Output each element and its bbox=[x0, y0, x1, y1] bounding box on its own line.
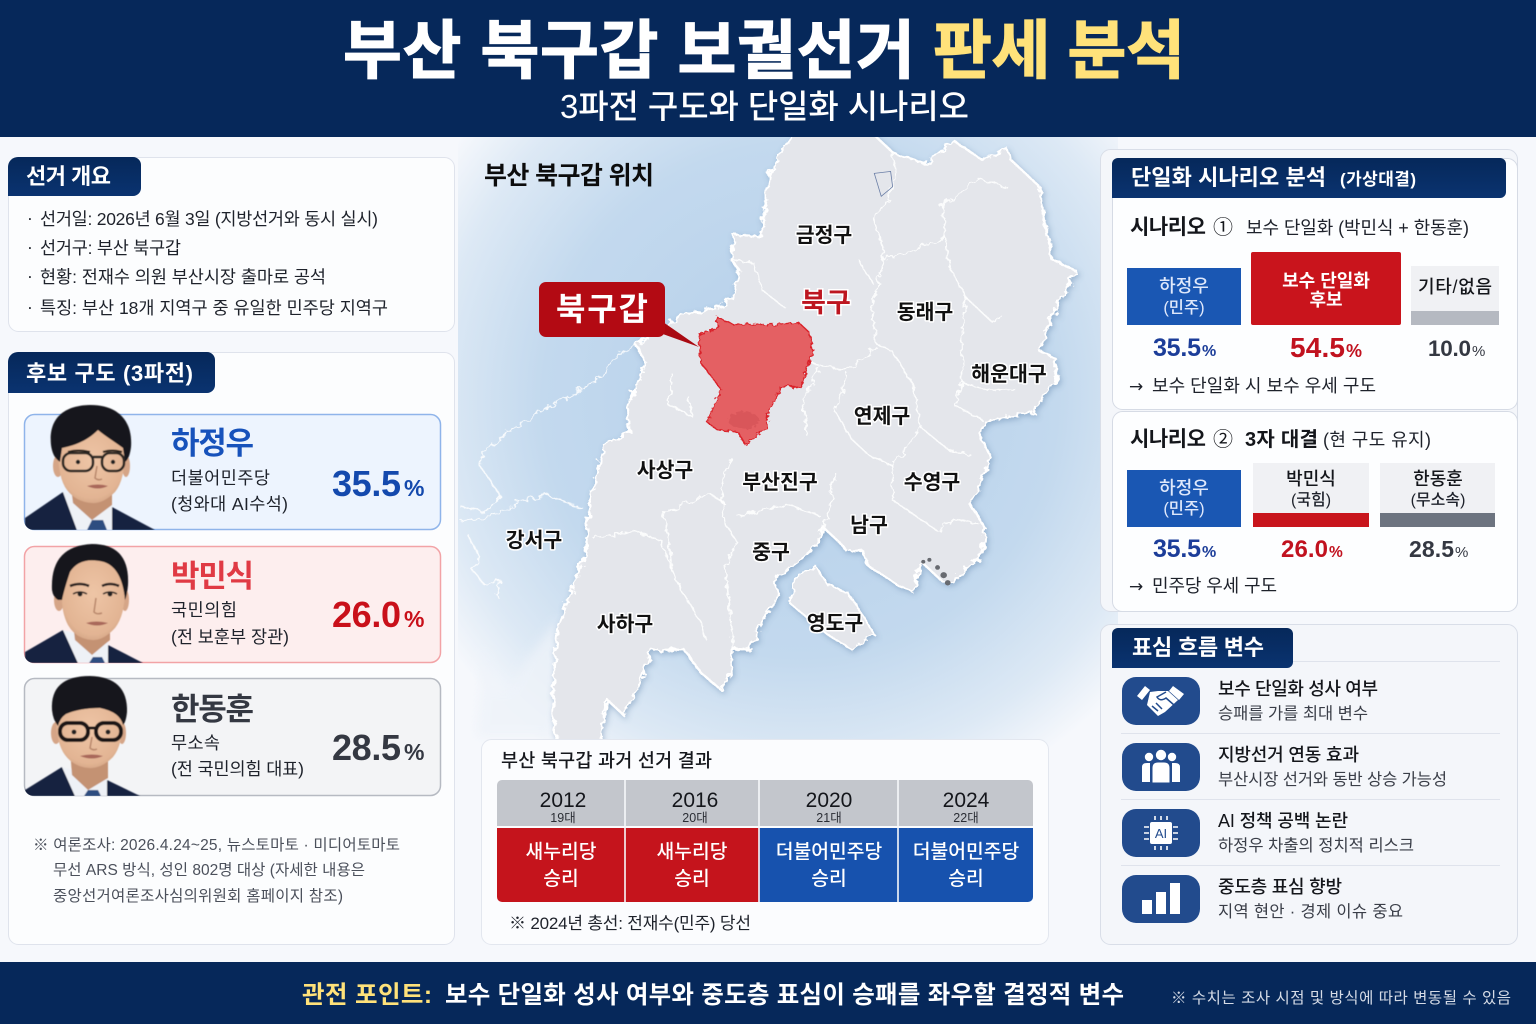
footer: ※ 수치는 조사 시점 및 방식에 따라 변동될 수 있음 bbox=[1171, 989, 1511, 1007]
scenario 1 box: (가상대결) bbox=[1340, 170, 1416, 189]
detail: northern reservoir and southern rocks bbox=[874, 171, 951, 585]
results table: 2016 bbox=[672, 789, 718, 812]
map district labels: 해운대구 bbox=[971, 363, 1047, 386]
header bbox=[0, 0, 1536, 137]
scenario 2 percentages: % bbox=[1455, 544, 1468, 561]
portrait: Han Dong-hoon bbox=[25, 676, 140, 796]
results table: 20대 bbox=[682, 811, 708, 825]
results table: 19대 bbox=[550, 811, 576, 825]
title bbox=[343, 15, 1185, 87]
overview bullets: · bbox=[27, 266, 33, 286]
icon: AI chip: AI bbox=[1155, 826, 1167, 841]
candidate card: Han Dong-hoon: % bbox=[404, 739, 424, 765]
scenario 1 box: ① bbox=[1213, 216, 1233, 239]
portrait: Park Min-sik bbox=[25, 544, 143, 663]
scenario 1 bars: 후보 bbox=[1309, 290, 1343, 310]
item: AI policy vacuum: AI 정책 공백 논란 bbox=[1218, 811, 1348, 831]
candidate card: Han Dong-hoon: (전 국민의힘 대표) bbox=[171, 759, 304, 779]
candidate card: Han Dong-hoon: 28.5 bbox=[332, 727, 401, 768]
results table: 더불어민주당 bbox=[913, 841, 1019, 863]
survey note bbox=[33, 836, 400, 905]
scenario 1 conclusion: 보수 단일화 시 보수 우세 구도 bbox=[1152, 376, 1376, 396]
candidate card: Park Min-sik: % bbox=[404, 606, 424, 632]
results table: 2024 bbox=[943, 789, 990, 812]
candidate card: Ha Jung-woo: % bbox=[404, 475, 424, 501]
candidate card: Han Dong-hoon: 한동훈 bbox=[171, 692, 254, 727]
candidate card: Ha Jung-woo: 더불어민주당 bbox=[171, 468, 270, 488]
panel: past election results bbox=[482, 740, 1048, 944]
overview bullets: 선거구: 부산 북구갑 bbox=[40, 238, 181, 258]
overview bullets: · bbox=[27, 297, 33, 317]
scenario 1 percentages: % bbox=[1202, 343, 1216, 360]
scenario 2 percentages: % bbox=[1202, 544, 1216, 561]
results table: 21대 bbox=[816, 811, 842, 825]
survey note: ※ 여론조사: 2026.4.24~25, 뉴스토마토 · 미디어토마토 bbox=[33, 836, 400, 854]
candidate card: Han Dong-hoon: 무소속 bbox=[171, 733, 220, 753]
item: conservative unification: 승패를 가를 최대 변수 bbox=[1218, 704, 1368, 723]
map district labels: 금정구 bbox=[796, 224, 852, 247]
map district labels: 사상구 bbox=[637, 459, 693, 482]
scenario 2 bars: (국힘) bbox=[1291, 491, 1331, 509]
map district labels: 영도구 bbox=[807, 612, 863, 635]
scenario 1 bars: 보수 단일화 bbox=[1282, 271, 1370, 291]
scenario 1 percentages: % bbox=[1346, 341, 1362, 361]
title: 부산 북구갑 보궐선거 bbox=[343, 15, 915, 87]
overview bullets: 현황: 전재수 의원 부산시장 출마로 공석 bbox=[40, 267, 326, 287]
scenario 2 bars: 하정우 bbox=[1159, 478, 1209, 498]
scenario 2 percentages: 26.0 bbox=[1281, 536, 1328, 563]
icon: handshake bbox=[1122, 677, 1200, 725]
callout: Bukgu-gap label bbox=[539, 282, 699, 347]
title: 판세 분석 bbox=[933, 15, 1185, 87]
scenario 2 bars: (무소속) bbox=[1411, 491, 1465, 509]
results table: 22대 bbox=[953, 811, 979, 825]
candidate card: Park Min-sik: 박민식 bbox=[171, 559, 254, 594]
scenario 2 box: 시나리오 bbox=[1130, 428, 1206, 451]
scenario 1 box: 보수 단일화 (박민식 + 한동훈) bbox=[1246, 218, 1469, 238]
panel: candidates bbox=[8, 352, 454, 944]
scenario 1 percentages bbox=[1153, 332, 1485, 363]
results table: 2020 bbox=[806, 789, 852, 812]
results table: 승리 bbox=[948, 868, 984, 890]
scenario 1 percentages: 35.5 bbox=[1153, 334, 1201, 362]
callout: Bukgu-gap label: 북구갑 bbox=[556, 291, 648, 327]
map district labels: 동래구 bbox=[897, 301, 953, 324]
scenario 2 bars: (민주) bbox=[1163, 499, 1205, 518]
results table: 승리 bbox=[674, 868, 710, 890]
footer bbox=[0, 962, 1536, 1024]
map district labels: 연제구 bbox=[854, 405, 910, 428]
scenario 1 percentages: 10.0 bbox=[1428, 336, 1471, 361]
item: moderate voters: 지역 현안 · 경제 이슈 중요 bbox=[1218, 902, 1403, 921]
scenario 2 box bbox=[1112, 412, 1518, 612]
item: local election linkage: 부산시장 선거와 동반 상승 가능성 bbox=[1218, 770, 1447, 789]
survey note: 중앙선거여론조사심의위원회 홈페이지 참조) bbox=[53, 887, 343, 905]
scenario 2 percentages bbox=[1153, 535, 1468, 563]
overview bullets bbox=[27, 208, 388, 318]
candidate card: Ha Jung-woo: (청와대 AI수석) bbox=[171, 494, 288, 514]
candidate card: Park Min-sik: 국민의힘 bbox=[171, 600, 237, 620]
overview bullets: · bbox=[27, 237, 33, 257]
results table: 새누리당 bbox=[657, 841, 728, 863]
map district labels: 강서구 bbox=[506, 529, 562, 552]
scenario 1 bars bbox=[1127, 252, 1499, 325]
results table: 더불어민주당 bbox=[776, 841, 882, 863]
scenario 1 box: 시나리오 bbox=[1130, 216, 1206, 239]
map: Busan districts bbox=[458, 129, 1118, 757]
candidate card: Ha Jung-woo bbox=[24, 405, 440, 530]
scenario 2 percentages: % bbox=[1329, 544, 1343, 561]
overview bullets: · bbox=[27, 208, 33, 228]
subtitle: 3파전 구도와 단일화 시나리오 bbox=[560, 88, 969, 125]
results table: 승리 bbox=[811, 868, 847, 890]
overview bullets: 특징: 부산 18개 지역구 중 유일한 민주당 지역구 bbox=[40, 298, 388, 318]
item: moderate voters: 중도층 표심 향방 bbox=[1218, 877, 1342, 897]
scenario 2 bars: 한동훈 bbox=[1413, 469, 1463, 489]
Bukgu-gap highlighted district bbox=[699, 317, 813, 445]
footer: 보수 단일화 성사 여부와 중도층 표심이 승패를 좌우할 결정적 변수 bbox=[445, 981, 1124, 1009]
results table: 승리 bbox=[543, 868, 579, 890]
portrait: Ha Jung-woo bbox=[25, 405, 155, 530]
item: conservative unification bbox=[1122, 677, 1378, 725]
map district labels: 사하구 bbox=[597, 613, 653, 636]
icon: bar chart bbox=[1122, 875, 1200, 923]
scenario 2 bars bbox=[1127, 463, 1495, 527]
map district labels bbox=[506, 224, 1047, 636]
results table bbox=[497, 780, 1033, 902]
item: local election linkage bbox=[1122, 743, 1447, 791]
panel: election overview bbox=[8, 157, 454, 332]
scenario 2 percentages: 35.5 bbox=[1153, 535, 1201, 563]
survey note: 무선 ARS 방식, 성인 802명 대상 (자세한 내용은 bbox=[53, 861, 365, 879]
scenario 1 bars: 기타/없음 bbox=[1418, 277, 1492, 297]
scenario 1 bars: 하정우 bbox=[1159, 276, 1209, 296]
item: AI policy vacuum bbox=[1122, 809, 1414, 857]
icon: AI chip bbox=[1122, 809, 1200, 857]
map district labels: 수영구 bbox=[904, 471, 960, 494]
panel: swing vote variables bbox=[1100, 624, 1518, 944]
candidate card: Ha Jung-woo: 35.5 bbox=[332, 463, 401, 504]
map district labels: 중구 bbox=[752, 541, 790, 564]
panel: past election results: ※ 2024년 총선: 전재수(민주) 당선 bbox=[509, 914, 751, 933]
panel: past election results: 부산 북구갑 과거 선거 결과 bbox=[501, 750, 712, 771]
scenario 2 box: 3자 대결 bbox=[1245, 428, 1318, 451]
scenario 2 conclusion: → bbox=[1129, 577, 1143, 597]
candidate card: Han Dong-hoon bbox=[24, 676, 440, 796]
panel: unification scenarios bbox=[1100, 150, 1518, 612]
scenario 1 percentages: % bbox=[1472, 343, 1485, 360]
icon: people bbox=[1122, 743, 1200, 791]
scenario 1 box bbox=[1112, 158, 1518, 410]
scenario 1 percentages: 54.5 bbox=[1290, 332, 1345, 363]
results table: 2012 bbox=[540, 789, 586, 812]
scenario 1 conclusion: → bbox=[1129, 377, 1143, 397]
scenario 2 box: (현 구도 유지) bbox=[1323, 430, 1431, 450]
scenario 2 percentages: 28.5 bbox=[1409, 536, 1454, 562]
results table: 새누리당 bbox=[526, 841, 597, 863]
item: local election linkage: 지방선거 연동 효과 bbox=[1218, 745, 1359, 765]
candidate card: Park Min-sik bbox=[24, 544, 440, 663]
scenario 2 conclusion: 민주당 우세 구도 bbox=[1152, 576, 1277, 596]
overview bullets: 선거일: 2026년 6월 3일 (지방선거와 동시 실시) bbox=[40, 209, 378, 229]
panel: election overview: 선거 개요 bbox=[26, 164, 111, 189]
map district labels: 북구 bbox=[801, 288, 851, 318]
item: AI policy vacuum: 하정우 차출의 정치적 리스크 bbox=[1218, 836, 1414, 855]
item: moderate voters bbox=[1122, 875, 1403, 923]
scenario 1 bars: (민주) bbox=[1163, 298, 1205, 317]
footer: 관전 포인트: bbox=[302, 981, 432, 1009]
scenario 1 box: 단일화 시나리오 분석 bbox=[1131, 165, 1326, 190]
scenario 2 bars: 박민식 bbox=[1286, 469, 1336, 489]
scenario 2 box: ② bbox=[1213, 428, 1233, 451]
panel: swing vote variables: 표심 흐름 변수 bbox=[1132, 635, 1264, 660]
map district labels: 부산진구 bbox=[742, 471, 818, 494]
panel: candidates: 후보 구도 (3파전) bbox=[26, 361, 193, 386]
candidate card: Ha Jung-woo: 하정우 bbox=[171, 426, 254, 461]
map district labels: 남구 bbox=[850, 514, 888, 537]
item: conservative unification: 보수 단일화 성사 여부 bbox=[1218, 679, 1378, 699]
candidate card: Park Min-sik: 26.0 bbox=[332, 594, 401, 635]
candidate card: Park Min-sik: (전 보훈부 장관) bbox=[171, 627, 289, 647]
map title: 부산 북구갑 위치 bbox=[484, 162, 654, 190]
